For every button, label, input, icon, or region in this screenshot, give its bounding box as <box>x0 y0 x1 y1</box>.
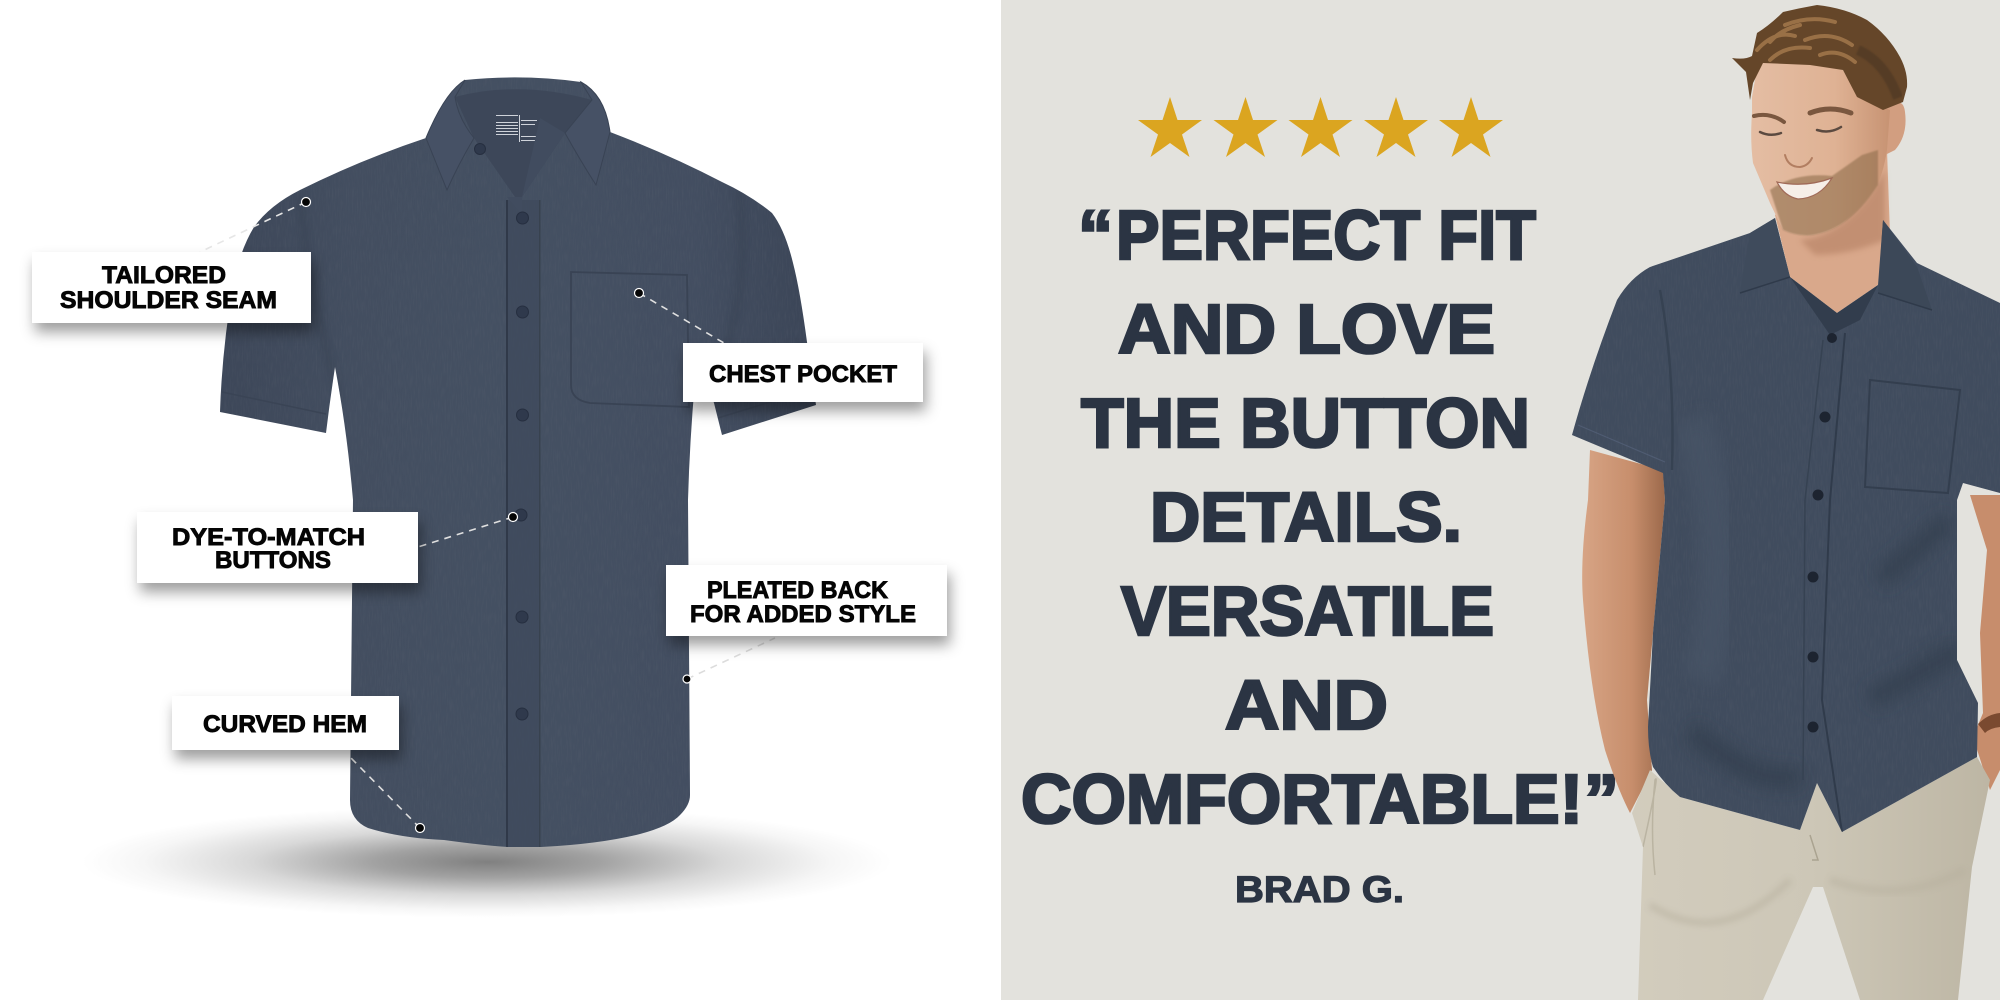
collar leaves <box>426 80 474 190</box>
man: jaw shadow on neck <box>1800 170 1885 255</box>
man: left arm <box>1582 450 1665 813</box>
reviewer name: BRAD G. <box>1235 869 1404 910</box>
callout: tailored shoulder seam <box>32 198 311 323</box>
review quote text: PERFECT FIT <box>1116 196 1536 274</box>
review quote text: ” <box>1584 760 1619 838</box>
neck opening <box>455 89 592 197</box>
man: ear <box>1885 102 1906 155</box>
man: face <box>1751 60 1890 235</box>
callout: chest pocket: CHEST POCKET <box>709 361 897 388</box>
callout: pleated back: PLEATED BACK <box>707 577 889 604</box>
man: shirt buttons <box>1808 333 1837 732</box>
callout: dye-to-match buttons <box>137 512 518 583</box>
man: eyes and brows <box>1754 109 1851 167</box>
product image: navy short-sleeve shirt <box>210 70 830 860</box>
panel: white product background <box>0 0 1001 1000</box>
review quote text: THE BUTTON <box>1081 384 1530 462</box>
man: smile <box>1777 178 1832 199</box>
review quote text: AND LOVE <box>1118 290 1495 368</box>
callout: curved hem: CURVED HEM <box>203 711 367 738</box>
floor shadow under shirt <box>82 806 892 918</box>
man: shirt collar <box>1740 218 1790 293</box>
man: bracelet <box>1978 713 2000 733</box>
callout: tailored shoulder seam: TAILORED <box>102 262 226 289</box>
callout: tailored shoulder seam: SHOULDER SEAM <box>60 287 277 314</box>
callout: curved hem <box>172 696 424 832</box>
callout: dye-to-match buttons: DYE-TO-MATCH <box>172 524 365 551</box>
review quote text: “ <box>1078 196 1113 274</box>
review quote text <box>1021 196 1619 838</box>
shirt buttons <box>474 144 528 720</box>
man: navy shirt <box>1570 215 2000 835</box>
man: beard <box>1770 150 1878 235</box>
photo: smiling man wearing the shirt <box>1570 5 2000 1000</box>
man: khaki trousers <box>1632 757 1990 1000</box>
review quote text: COMFORTABLE! <box>1021 760 1583 838</box>
callout: dye-to-match buttons: BUTTONS <box>215 547 331 574</box>
icon: five gold stars rating <box>1138 97 1503 157</box>
callout: chest pocket <box>634 288 923 402</box>
callout: pleated back <box>666 565 947 683</box>
man: right arm and hand <box>1970 495 2000 790</box>
review quote text: VERSATILE <box>1121 572 1494 650</box>
pocket <box>571 272 689 407</box>
review quote text: AND <box>1225 666 1388 744</box>
neck label print <box>496 115 537 142</box>
panel: grey review background <box>1001 0 2000 1000</box>
man: neck and chest skin <box>1775 150 1890 313</box>
man: curly brown hair <box>1732 5 1907 110</box>
callout: pleated back: FOR ADDED STYLE <box>690 601 916 628</box>
review quote text: DETAILS. <box>1150 478 1462 556</box>
